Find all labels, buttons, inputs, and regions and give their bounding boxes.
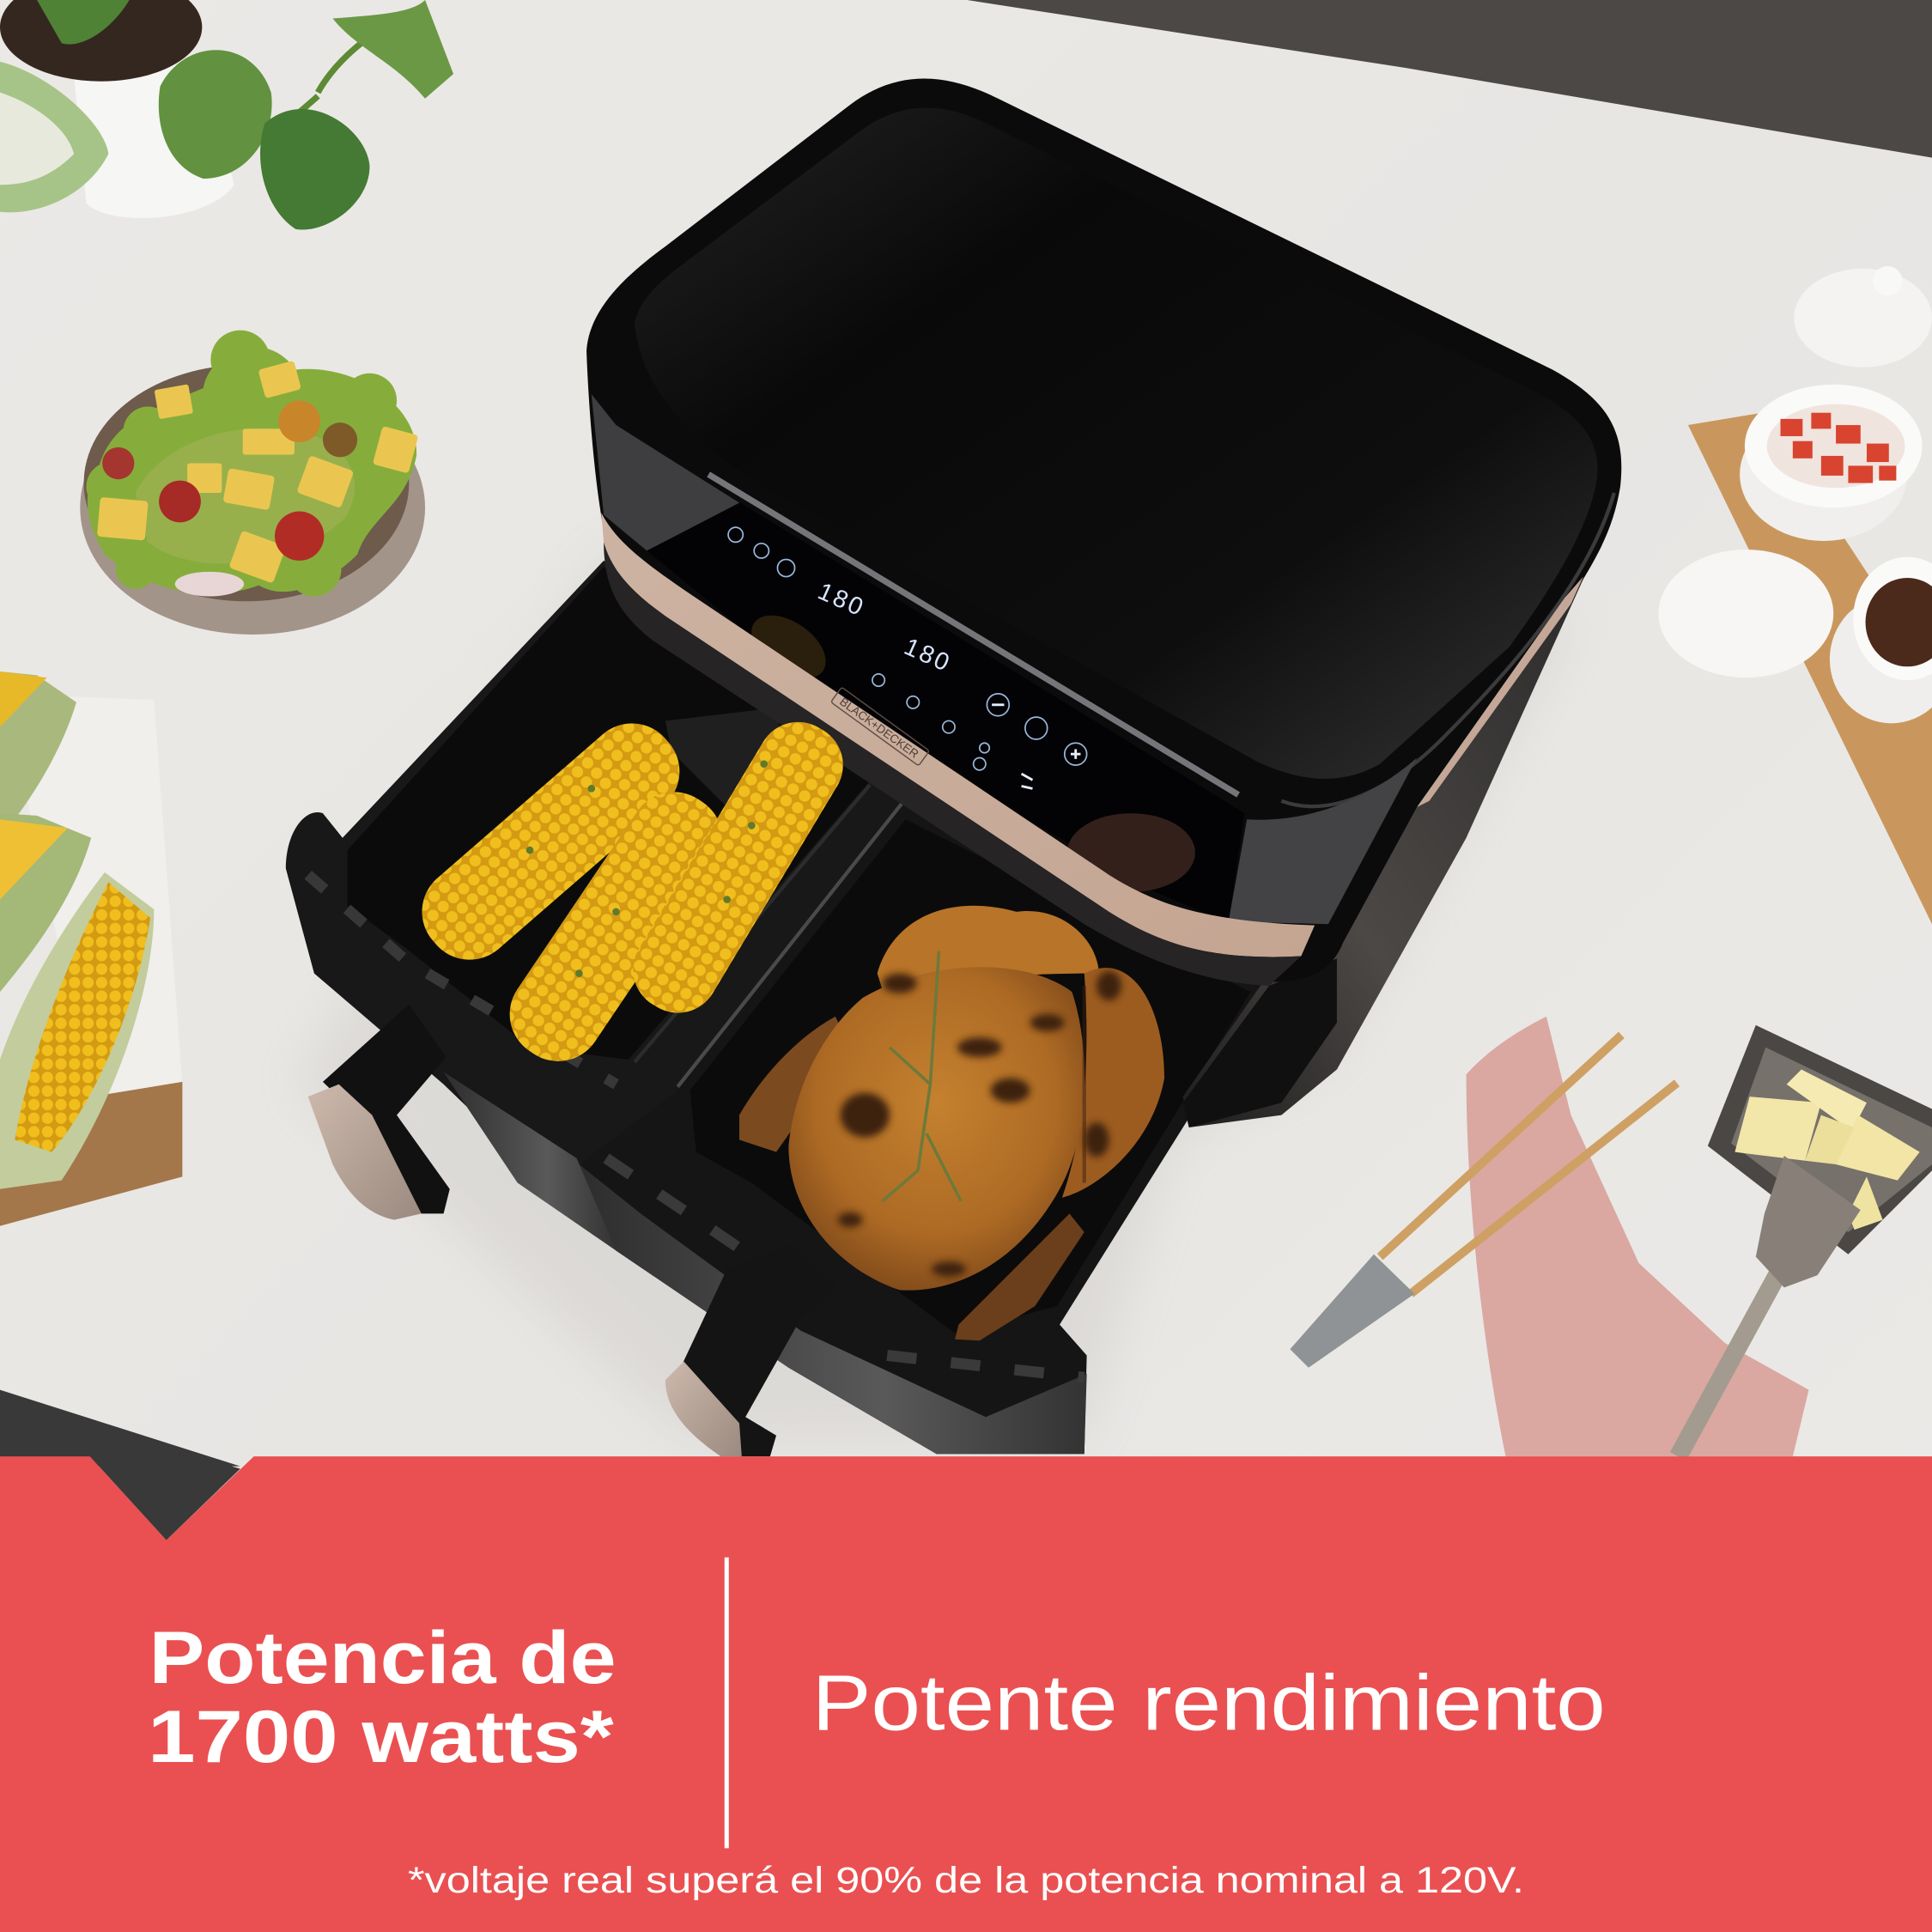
- white lid top: [1794, 266, 1932, 368]
- corn on cutting board: [0, 671, 182, 1226]
- control panel glass: [647, 502, 1244, 923]
- reflection of corn: [740, 603, 837, 691]
- dark notch in banner: [90, 1456, 240, 1540]
- display 180 right: 180: [900, 633, 956, 677]
- bowl of chopped tomato: [1740, 385, 1923, 541]
- bowl of star anise: [1830, 557, 1932, 723]
- front gloss sides: [592, 394, 739, 550]
- display 180 left: 180: [814, 578, 869, 623]
- plant in white pot: [0, 0, 453, 230]
- rose gold band: [601, 513, 1315, 957]
- pink napkin: [1467, 1017, 1809, 1456]
- touch buttons: [728, 527, 1087, 788]
- right basket: [579, 795, 1272, 1454]
- heading: Potencia de 1700 watts: Potencia de: [149, 1617, 616, 1699]
- lid glossy top: [635, 108, 1597, 779]
- wooden board with bowls: [1658, 266, 1932, 924]
- rose band right side: [1417, 577, 1583, 807]
- tongs: [1290, 1035, 1677, 1368]
- dark floor bottom left: [0, 1390, 240, 1467]
- butter dish: [1708, 1025, 1932, 1255]
- lower trim: [604, 542, 1301, 986]
- red banner: [0, 1456, 1932, 1932]
- salad bowl: [80, 331, 425, 635]
- rear vents: [606, 1158, 1084, 1377]
- chicken right wing: [1062, 968, 1164, 1198]
- heading: Potencia de 1700 watts: [148, 1617, 616, 1778]
- basting brush: [1678, 1156, 1861, 1456]
- lid rim highlight: [1281, 493, 1614, 806]
- roast chicken: [739, 906, 1164, 1340]
- silver front strip: [708, 474, 1238, 795]
- vertical divider: [725, 1558, 729, 1848]
- main body housing: [586, 78, 1621, 982]
- subheading: Potente rendimiento: Potente rendimiento: [812, 1660, 1606, 1747]
- left basket: [286, 561, 906, 1250]
- white lid lower: [1658, 550, 1833, 677]
- air fryer: [286, 78, 1621, 1456]
- main body side: [1183, 579, 1583, 1127]
- dark floor top right: [967, 0, 1932, 158]
- handle right: [665, 1244, 838, 1456]
- chicken breast: [788, 967, 1084, 1291]
- handle left: [308, 1004, 450, 1220]
- heading: Potencia de 1700 watts: 1700 watts*: [148, 1696, 614, 1778]
- chicken wing top: [878, 906, 1099, 1004]
- soft shadow under air fryer: [295, 555, 1577, 1442]
- footnote: *voltaje real superá el 90% de la potencia nominal a 120V.: [408, 1860, 1524, 1901]
- reflection of chicken: [1067, 813, 1195, 892]
- corn cobs: [404, 705, 858, 1078]
- brand badge: BLACK+DECKER: [837, 695, 921, 761]
